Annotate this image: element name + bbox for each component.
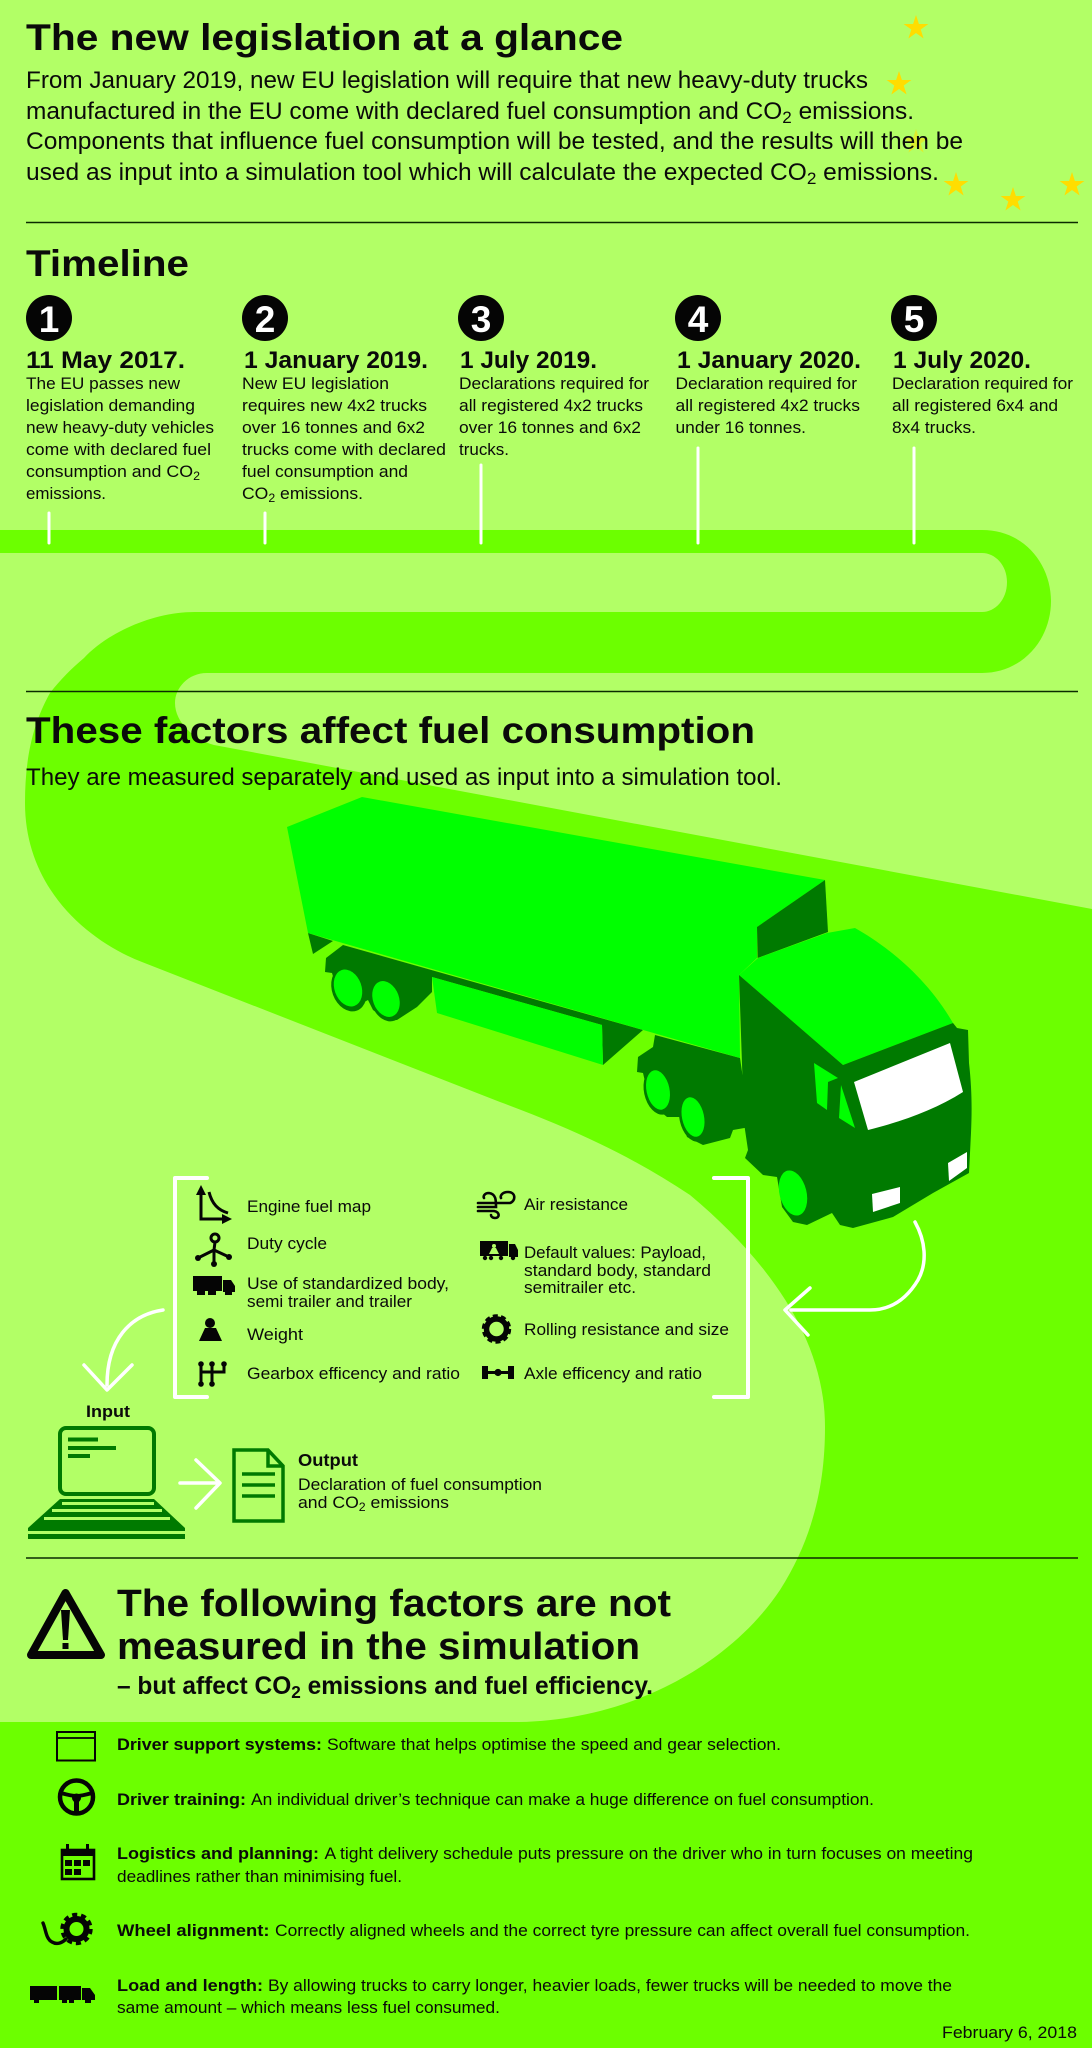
title: the new legislation at a glance: The new legislation at a glance xyxy=(26,17,623,58)
output text: 2 xyxy=(359,1500,366,1514)
left input bracket xyxy=(175,1178,207,1397)
intro paragraph: emissions. xyxy=(816,159,939,186)
output text xyxy=(298,1450,542,1514)
item: driver training xyxy=(60,1780,874,1814)
text: driver training: Driver training: xyxy=(117,1790,246,1809)
heading: timeline: Timeline xyxy=(26,243,189,284)
label: standardized body: semi trailer and trailer xyxy=(247,1292,412,1311)
stars xyxy=(887,15,1084,210)
timeline step 2: 2 xyxy=(268,493,275,505)
road background xyxy=(0,530,1092,2048)
text: load and length: same amount – which means less fuel consumed. xyxy=(117,1998,500,2017)
heading: factors not measured: emissions and fuel efficiency. xyxy=(301,1672,653,1700)
output text: Declaration of fuel consumption xyxy=(298,1475,542,1494)
timeline step 3: Declarations required for xyxy=(459,375,650,393)
text: driver support xyxy=(117,1735,781,1754)
text: wheel alignment: Wheel alignment: xyxy=(117,1921,270,1940)
timeline step 1: emissions. xyxy=(26,485,106,503)
label: standardized body xyxy=(247,1274,449,1311)
timeline step 1: 2 xyxy=(193,471,200,483)
label: engine fuel map: Engine fuel map xyxy=(247,1197,371,1216)
icon: default values truck xyxy=(480,1241,518,1260)
item: wheel alignment xyxy=(43,1915,970,1943)
heading: factors not measured: The following factors are not xyxy=(117,1583,671,1625)
icon: engine fuel map xyxy=(196,1185,232,1224)
timeline step 3: 1 July 2019. xyxy=(460,347,597,374)
timeline step 2: 1 January 2019. xyxy=(244,347,428,374)
timeline step 4: 4 xyxy=(688,299,709,340)
text: logistics: A tight delivery schedule puts pressure on the driver who in turn focuses on meeting xyxy=(324,1844,973,1863)
icon: warning triangle xyxy=(31,1593,101,1655)
text: load and length xyxy=(117,1976,952,2017)
timeline step 5: 8x4 trucks. xyxy=(892,419,976,437)
label: input: Input xyxy=(86,1403,131,1421)
arrow: input to output xyxy=(180,1460,220,1508)
factor list: left column xyxy=(193,1185,460,1387)
item: logistics and planning xyxy=(61,1844,973,1886)
text: load and length: By allowing trucks to carry longer, heavier loads, fewer trucks will be needed to move the xyxy=(268,1976,952,1995)
icon: duty cycle xyxy=(195,1234,232,1267)
intro paragraph: Components that influence fuel consumption will be tested, and the results will then be xyxy=(26,128,963,155)
label: default values: semitrailer etc. xyxy=(524,1278,636,1297)
item: load and length xyxy=(30,1976,952,2017)
timeline step 2 xyxy=(242,295,446,543)
label: default values xyxy=(524,1243,711,1297)
item: driver support systems xyxy=(57,1732,781,1760)
icon: axle xyxy=(482,1366,514,1379)
text: logistics: Logistics and planning: xyxy=(117,1844,319,1863)
intro paragraph: emissions. xyxy=(792,98,914,125)
timeline step 3 xyxy=(458,295,650,543)
text: wheel alignment: Correctly aligned wheels and the correct tyre pressure can affect overall fuel consumption. xyxy=(275,1921,970,1940)
timeline step 5: Declaration required for xyxy=(892,375,1074,393)
timeline step 1 xyxy=(26,295,214,543)
label: default values: Default values: Payload, xyxy=(524,1243,706,1262)
icon: wheel alignment xyxy=(43,1915,90,1943)
timeline step 4 xyxy=(675,295,861,543)
label: duty cycle: Duty cycle xyxy=(247,1234,327,1253)
timeline step 1: The EU passes new xyxy=(26,375,180,393)
timeline step 2: New EU legislation xyxy=(242,375,389,393)
icon: steering wheel xyxy=(60,1780,93,1814)
text: driver support: Software that helps optimise the speed and gear selection. xyxy=(327,1735,781,1754)
icon: document xyxy=(234,1450,283,1521)
timeline step 1: 11 May 2017. xyxy=(26,347,185,374)
heading: factors not measured: – but affect CO xyxy=(117,1672,295,1700)
heading: factors not measured: 2 xyxy=(291,1682,301,1702)
intro paragraph: 2 xyxy=(807,169,816,188)
arrow: truck to factors xyxy=(785,1222,924,1335)
intro paragraph: used as input into a simulation tool which will calculate the expected CO xyxy=(26,159,790,186)
timeline step 1: consumption and CO xyxy=(26,463,181,481)
icon: two trucks xyxy=(30,1986,95,2003)
intro paragraph: 2 xyxy=(782,108,792,127)
timeline step 4: Declaration required for xyxy=(676,375,858,393)
label: weight: Weight xyxy=(247,1325,303,1344)
output text: and CO xyxy=(298,1493,357,1512)
subheading: They are measured separately and used as input into a simulation tool. xyxy=(26,764,782,791)
timeline step 1: 1 xyxy=(39,299,59,340)
icon: browser window xyxy=(57,1732,95,1760)
icon: calendar xyxy=(61,1844,95,1879)
timeline step 2: requires new 4x2 trucks xyxy=(242,397,427,415)
intro paragraph: From January 2019, new EU legislation will require that new heavy-duty trucks xyxy=(26,67,868,94)
right input bracket xyxy=(714,1178,748,1397)
text: load and length: Load and length: xyxy=(117,1976,263,1995)
timeline step 2: CO xyxy=(242,485,267,503)
text: logistics xyxy=(117,1844,973,1886)
timeline step 5: 5 xyxy=(904,299,924,340)
timeline step 5 xyxy=(891,295,1074,543)
label: default values: standard body, standard xyxy=(524,1261,711,1280)
timeline step 5: all registered 6x4 and xyxy=(892,397,1058,415)
timeline step 4: 1 January 2020. xyxy=(677,347,861,374)
heading: factors not measured xyxy=(117,1583,671,1702)
timeline step 3: 3 xyxy=(471,299,491,340)
timeline step 2: trucks come with declared xyxy=(242,441,446,459)
output text: Output xyxy=(298,1450,358,1470)
timeline step 2: emissions. xyxy=(275,485,363,503)
factor list: right column xyxy=(478,1192,729,1383)
timeline step 4: all registered 4x2 trucks xyxy=(676,397,860,415)
icon: truck xyxy=(193,1276,235,1295)
label: axle: Axle efficency and ratio xyxy=(524,1364,702,1383)
date stamp: February 6, 2018 xyxy=(942,2024,1077,2042)
output text: emissions xyxy=(366,1493,449,1512)
timeline step 2: fuel consumption and xyxy=(242,463,408,481)
intro paragraph: manufactured in the EU come with declared fuel consumption and CO xyxy=(26,98,769,125)
timeline step 3: all registered 4x2 trucks xyxy=(459,397,643,415)
intro paragraph xyxy=(26,67,963,188)
timeline step 3: trucks. xyxy=(459,441,509,459)
timeline step 1: come with declared fuel xyxy=(26,441,211,459)
timeline step 5: 1 July 2020. xyxy=(893,347,1031,374)
truck illustration xyxy=(287,797,972,1228)
timeline step 2: over 16 tonnes and 6x2 xyxy=(242,419,425,437)
icon: laptop xyxy=(28,1428,185,1539)
timeline step 1: new heavy-duty vehicles xyxy=(26,419,214,437)
icon: gearbox xyxy=(198,1361,227,1387)
text: logistics: deadlines rather than minimising fuel. xyxy=(117,1867,402,1886)
heading: factors not measured: measured in the simulation xyxy=(117,1626,640,1668)
timeline step 1: legislation demanding xyxy=(26,397,195,415)
icon: air resistance xyxy=(478,1192,514,1218)
label: rolling resistance: Rolling resistance and size xyxy=(524,1320,729,1339)
arrow: factors to input xyxy=(84,1310,163,1390)
label: air resistance: Air resistance xyxy=(524,1195,628,1214)
timeline step 4: under 16 tonnes. xyxy=(676,419,806,437)
timeline step 3: over 16 tonnes and 6x2 xyxy=(459,419,641,437)
label: gearbox: Gearbox efficency and ratio xyxy=(247,1364,460,1383)
timeline step 2: 2 xyxy=(255,299,275,340)
heading: these factors affect fuel consumption: These factors affect fuel consumption xyxy=(26,710,755,751)
text: driver support: Driver support systems: xyxy=(117,1735,322,1754)
icon: rolling resistance gear xyxy=(484,1316,510,1342)
text: driver training: An individual driver’s technique can make a huge difference on fuel consumption. xyxy=(251,1790,874,1809)
icon: weight xyxy=(199,1318,222,1341)
label: standardized body: Use of standardized body, xyxy=(247,1274,449,1293)
